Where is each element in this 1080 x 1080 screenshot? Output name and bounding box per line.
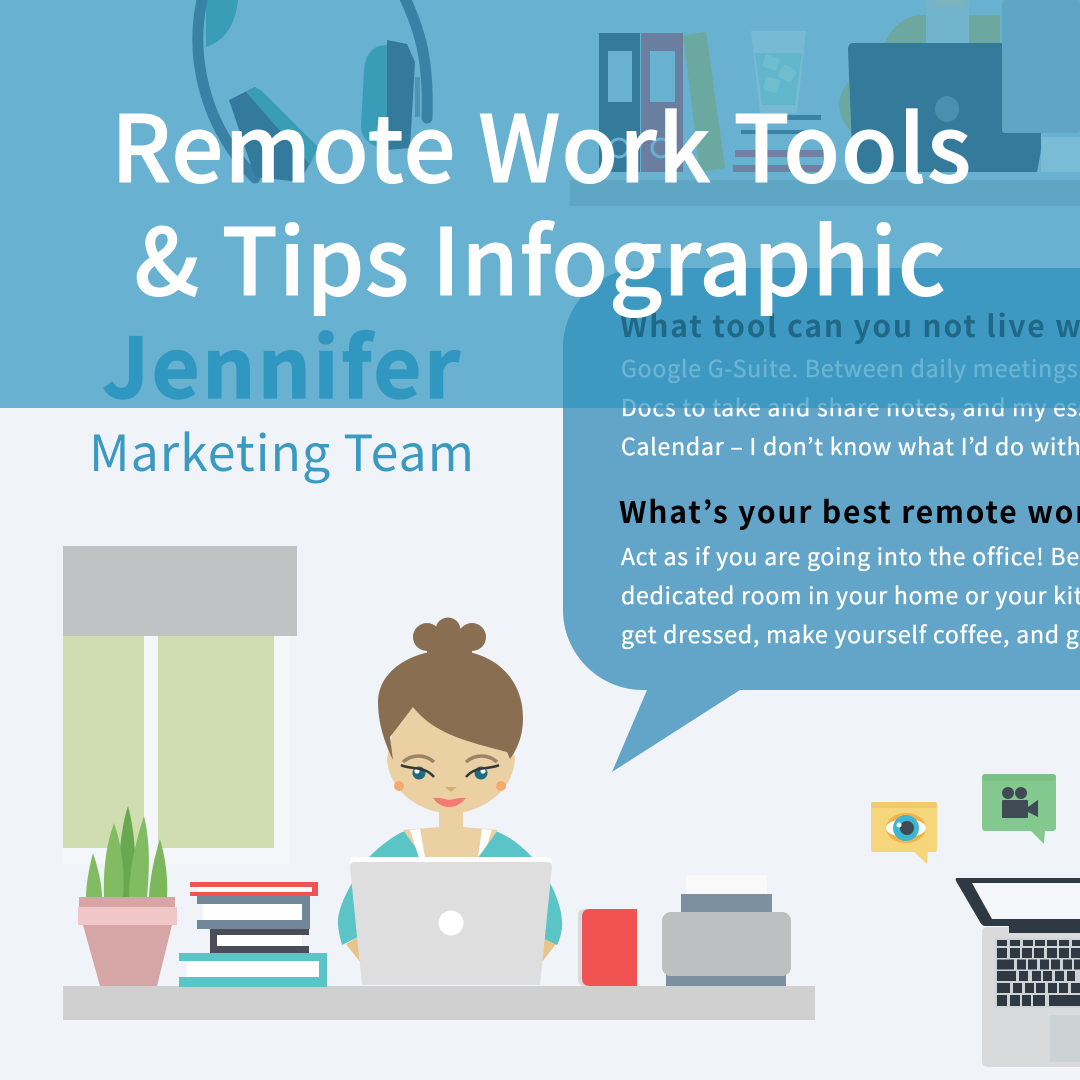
answer text: tool: Calendar – I don’t know what I’d do with bbox=[621, 428, 1080, 462]
face bbox=[387, 700, 515, 813]
laptop with keyboard bbox=[956, 878, 1080, 1067]
shelf bbox=[570, 180, 1080, 206]
answer text: remote work tip: dedicated room in your home or your kit bbox=[621, 577, 1080, 611]
window with blind bbox=[63, 546, 297, 864]
red notebook bbox=[578, 909, 637, 986]
stack of books bbox=[179, 882, 327, 987]
job title: Marketing Team: Marketing Team bbox=[89, 414, 475, 486]
name: Jennifer: Jennifer bbox=[102, 302, 462, 422]
icon: headphones bbox=[198, 0, 427, 182]
earrings bbox=[394, 781, 506, 791]
answer text: tool bbox=[621, 350, 1080, 462]
answer text: tool: Docs to take and share notes, and my ess bbox=[621, 389, 1080, 423]
blue translucent header band bbox=[0, 0, 1080, 408]
torso bbox=[369, 808, 532, 858]
stack of books on shelf bbox=[733, 115, 823, 172]
icon: eye speech bubble bbox=[871, 802, 937, 864]
nose bbox=[445, 787, 457, 792]
eyebrows bbox=[403, 756, 497, 762]
trackpad bbox=[1050, 1015, 1080, 1062]
answer text: remote work tip bbox=[621, 538, 1080, 650]
plant and laptop behind monitor bbox=[839, 0, 1080, 172]
icon: potted plant bbox=[78, 806, 177, 986]
keyboard keys bbox=[997, 940, 1080, 1006]
character: woman at laptop bbox=[338, 618, 562, 985]
eyes bbox=[401, 765, 499, 780]
title bbox=[111, 76, 972, 322]
binders and green book bbox=[599, 32, 725, 172]
printer bbox=[662, 875, 791, 986]
hair bbox=[378, 618, 523, 760]
lips bbox=[433, 798, 466, 807]
laptop bbox=[350, 857, 552, 985]
answer text: remote work tip: Act as if you are going into the office! Be bbox=[621, 538, 1080, 572]
glass of water bbox=[751, 31, 806, 113]
answer text: remote work tip: get dressed, make yourself coffee, and go bbox=[621, 616, 1080, 650]
desk bbox=[63, 986, 815, 1020]
icon: video camera speech bubble bbox=[982, 774, 1056, 844]
title: Remote Work Tools bbox=[111, 76, 972, 209]
answer text: tool: Google G-Suite. Between daily meetings bbox=[621, 350, 1078, 384]
title: & Tips Infographic bbox=[134, 189, 946, 322]
panel: speech bubble with interview answers bbox=[563, 268, 1080, 772]
arms bbox=[338, 883, 562, 962]
